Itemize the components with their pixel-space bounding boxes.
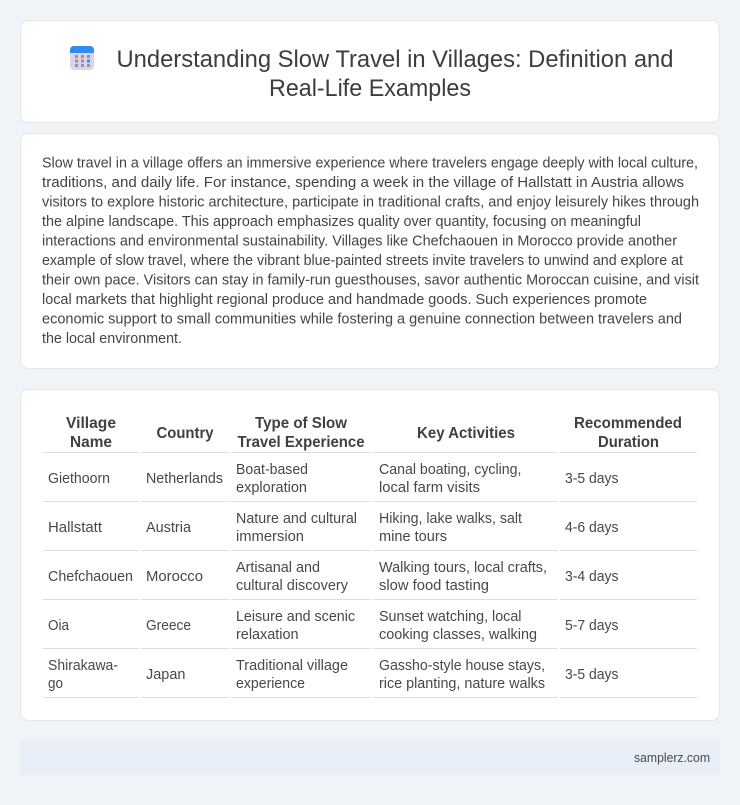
title xyxy=(116,46,674,102)
table row: Shirakawa-go: experience xyxy=(236,676,305,692)
table row: Chefchaouen xyxy=(48,560,618,594)
panel: village table xyxy=(20,390,720,720)
table row: Chefchaouen: slow food tasting xyxy=(379,578,489,594)
table row: Chefchaouen: Morocco xyxy=(146,569,203,585)
text block: description paragraph: visitors to explore historic architecture, participate in traditional crafts, and enjoy leisurely hikes through xyxy=(42,194,699,210)
table row: Hallstatt xyxy=(48,511,618,545)
table row: Hallstatt: Nature and cultural xyxy=(236,511,357,527)
text block: description paragraph: local markets that highlight regional produce and handmade goods. Such experiences promote xyxy=(42,292,647,308)
table row: Chefchaouen: Walking tours, local crafts, xyxy=(379,560,547,576)
table header: Type of Slow xyxy=(255,415,348,432)
footer credit: samplerz.com xyxy=(634,751,710,765)
table row: Shirakawa-go: rice planting, nature walks xyxy=(379,676,545,692)
table row dividers xyxy=(43,452,697,698)
table header: Country xyxy=(156,425,214,442)
text block: description paragraph: the local environment. xyxy=(42,331,182,347)
table header: Key Activities xyxy=(417,425,515,442)
table row: Hallstatt: 4-6 days xyxy=(565,520,618,536)
table row: Shirakawa-go: Traditional village xyxy=(236,658,348,674)
table row: Giethoorn: 3-5 days xyxy=(565,471,618,487)
table row: Chefchaouen: Chefchaouen xyxy=(48,569,133,585)
table row: Hallstatt: Hiking, lake walks, salt xyxy=(379,511,522,527)
table row: Shirakawa-go: Japan xyxy=(146,667,186,683)
table row: Shirakawa-go: 3-5 days xyxy=(565,667,618,683)
footer xyxy=(20,741,720,775)
title: Understanding Slow Travel in Villages: Definition and xyxy=(116,46,674,73)
text block: description paragraph: interactions and environmental sustainability. Villages like Chefchaouen in Morocco provide another xyxy=(42,234,677,250)
table row: Shirakawa-go: Gassho-style house stays, xyxy=(379,658,545,674)
text block: description paragraph: their own pace. Visitors can stay in family-run guesthouses, savor authentic Moroccan cuisine, and visit xyxy=(42,272,699,288)
table row: Giethoorn: Boat-based xyxy=(236,462,308,478)
icon: calendar xyxy=(70,46,94,70)
text block: description paragraph: traditions, and daily life. For instance, spending a week in the village of Hallstatt in Austria allows xyxy=(42,175,684,191)
table row: Hallstatt: mine tours xyxy=(379,529,447,545)
table row: Chefchaouen: cultural discovery xyxy=(236,578,349,594)
table row: Giethoorn: local farm visits xyxy=(379,480,480,496)
table row: Oia: Leisure and scenic xyxy=(236,609,355,625)
table header: Travel Experience xyxy=(238,434,365,451)
table row: Oia: cooking classes, walking xyxy=(379,627,537,643)
panel: description xyxy=(20,134,720,368)
table row: Giethoorn: Giethoorn xyxy=(48,471,110,487)
table row: Oia: 5-7 days xyxy=(565,618,618,634)
text block: description paragraph: example of slow travel, where the vibrant blue-painted streets invite travelers to unwind and explore at xyxy=(42,253,683,269)
table row: Shirakawa-go: go xyxy=(48,676,63,692)
text block: description paragraph: economic support to small communities while fostering a genuine connection between travelers and xyxy=(42,312,682,328)
text block: description paragraph xyxy=(42,156,699,347)
table row: Chefchaouen: Artisanal and xyxy=(236,560,320,576)
table row: Shirakawa-go xyxy=(48,658,618,692)
text block: description paragraph: Slow travel in a village offers an immersive experience where travelers engage deeply with local culture, xyxy=(42,156,698,172)
table row: Oia xyxy=(48,609,618,643)
table row: Chefchaouen: 3-4 days xyxy=(565,569,618,585)
table header: Recommended xyxy=(574,415,682,432)
table row: Oia: relaxation xyxy=(236,627,299,643)
panel: title card xyxy=(20,20,720,122)
table row: Giethoorn: exploration xyxy=(236,480,307,496)
text block: description paragraph: the alpine landscape. This approach emphasizes quality over quantity, focusing on meaningful xyxy=(42,214,641,230)
table header: Duration xyxy=(598,434,659,451)
table row: Giethoorn: Netherlands xyxy=(146,471,223,487)
table row: Hallstatt: immersion xyxy=(236,529,304,545)
table header: Name xyxy=(70,434,112,451)
title: Real-Life Examples xyxy=(269,75,471,102)
table row: Hallstatt: Hallstatt xyxy=(48,520,102,536)
table header xyxy=(66,415,682,451)
table row: Oia: Sunset watching, local xyxy=(379,609,522,625)
table row: Giethoorn: Canal boating, cycling, xyxy=(379,462,522,478)
table row: Hallstatt: Austria xyxy=(146,520,191,536)
table row: Oia: Greece xyxy=(146,618,191,634)
table row: Giethoorn xyxy=(48,462,618,496)
table row: Oia: Oia xyxy=(48,618,69,634)
table header: Village xyxy=(66,415,116,432)
table row: Shirakawa-go: Shirakawa- xyxy=(48,658,118,674)
